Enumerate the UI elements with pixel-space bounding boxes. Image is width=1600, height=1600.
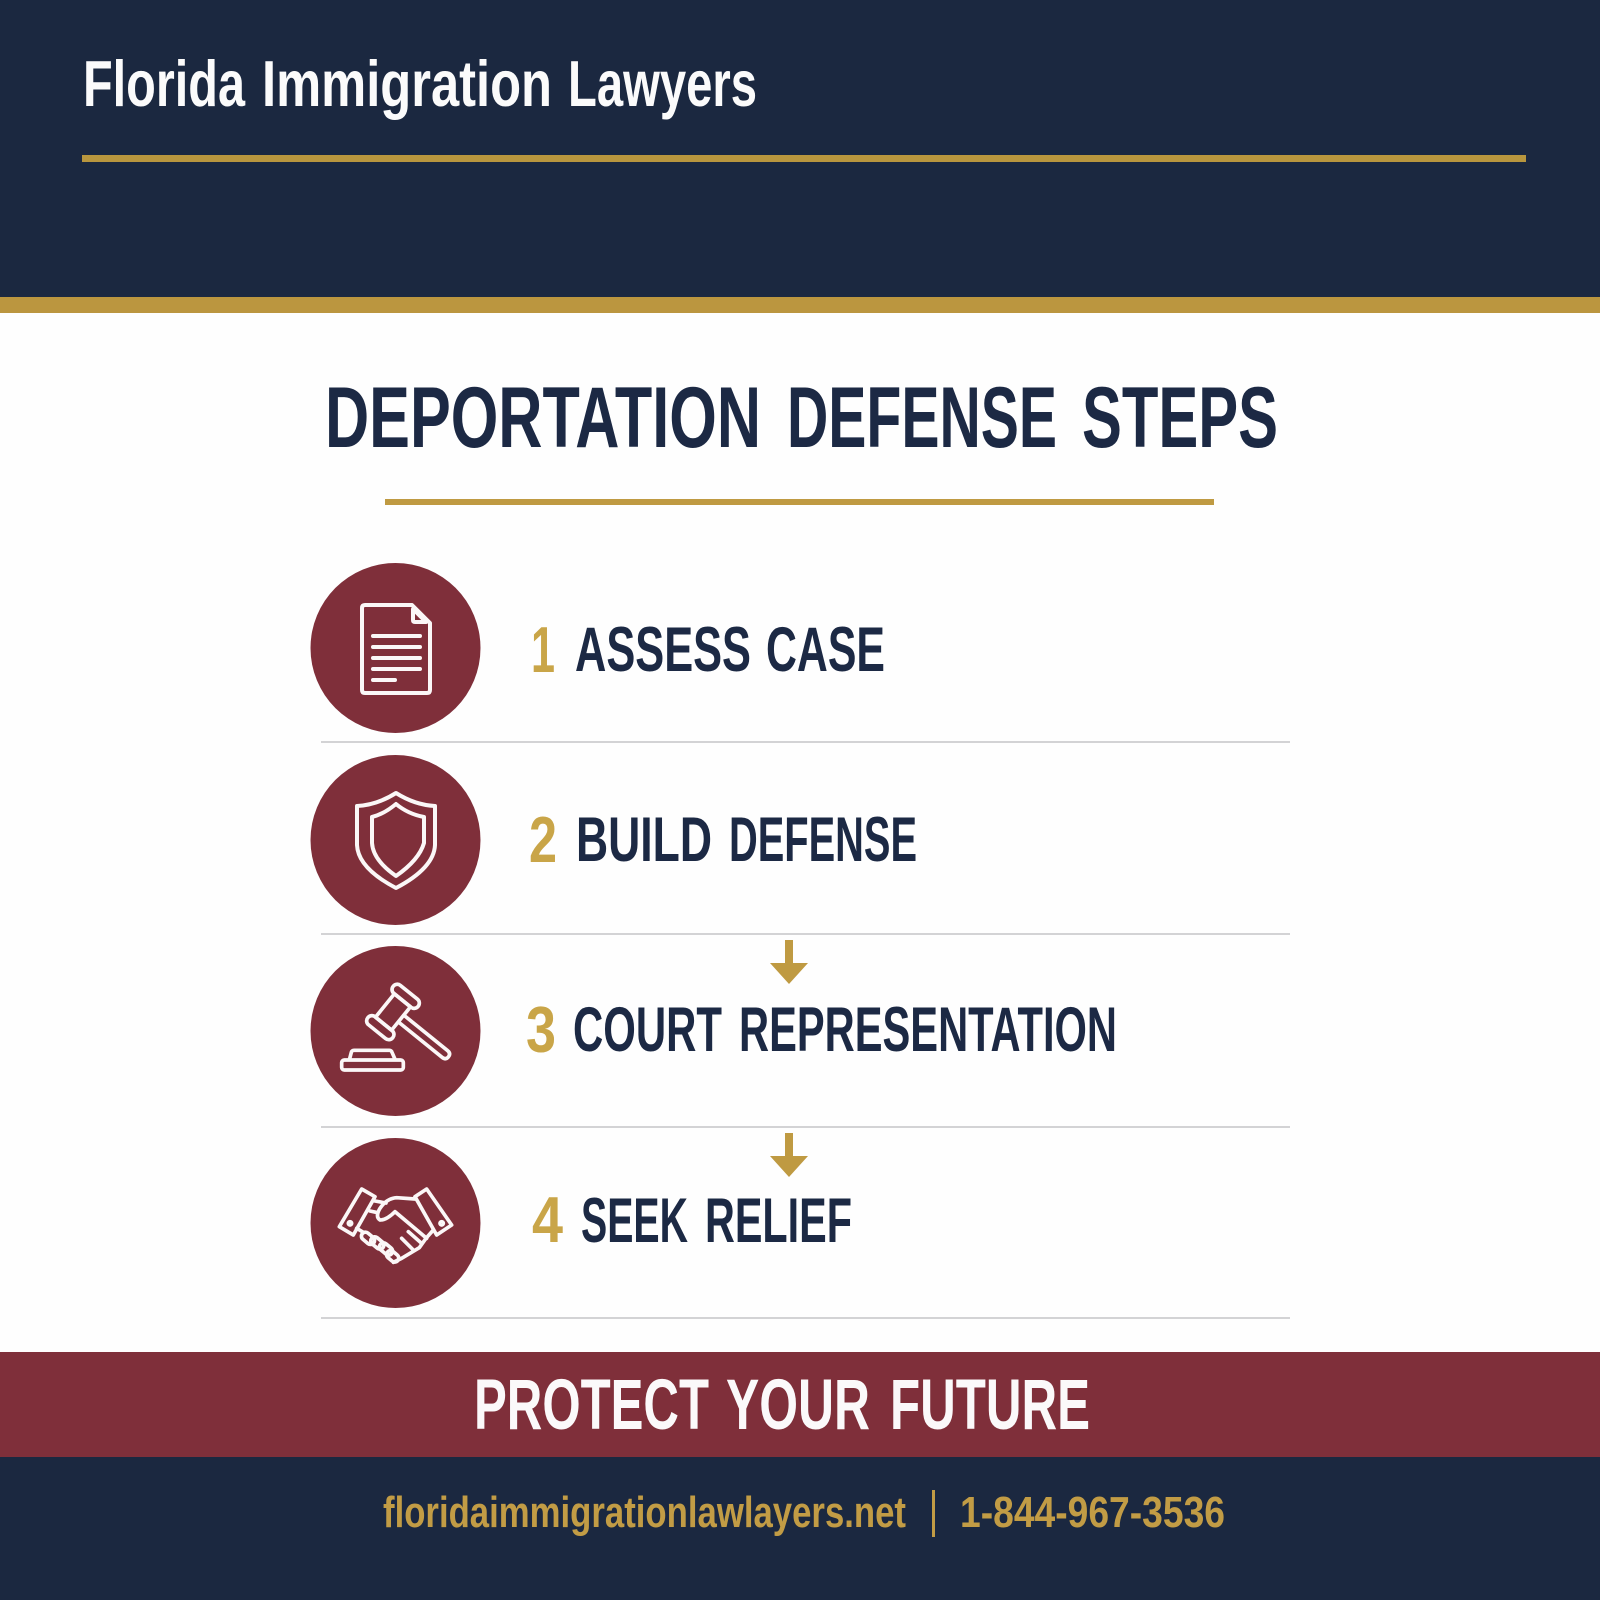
phone: 1-844-967-3536 (960, 1488, 1225, 1537)
title (325, 370, 1278, 466)
title: STEPS (1082, 370, 1278, 466)
step 3 label: 3 (526, 993, 556, 1066)
icon: handshake (310, 1138, 480, 1308)
icon: shield (310, 755, 480, 925)
arrow: step 2 to 3 (770, 940, 808, 984)
firm name: Florida (83, 47, 246, 120)
step 3: court representation (310, 946, 1117, 1116)
step 4 label: SEEK (581, 1186, 688, 1256)
step 2 label (529, 803, 917, 876)
header panel (0, 0, 1600, 313)
step 1 label: ASSESS (575, 615, 751, 685)
step 2 label: BUILD (576, 805, 712, 875)
step 3 label: COURT (573, 995, 722, 1065)
step 4 label: 4 (532, 1183, 563, 1256)
step 4: seek relief (310, 1138, 852, 1308)
step 3 label: REPRESENTATION (739, 995, 1117, 1065)
title: DEFENSE (787, 370, 1057, 466)
title: DEPORTATION (325, 370, 761, 466)
step 1: assess case (310, 563, 885, 733)
step 2 label: DEFENSE (729, 805, 917, 875)
firm name (83, 47, 757, 120)
footer panel (0, 1457, 1600, 1600)
website: floridaimmigrationlawlayers.net (383, 1488, 906, 1537)
step 2: build defense (310, 755, 917, 925)
call-to-action banner: PROTECT (474, 1366, 709, 1445)
firm name: Lawyers (568, 47, 757, 120)
step 4 label: RELIEF (705, 1186, 852, 1256)
arrow: step 3 to 4 (770, 1133, 808, 1177)
icon: gavel (310, 946, 480, 1116)
step 1 label (531, 613, 885, 686)
step 4 label (532, 1183, 852, 1256)
call-to-action banner: YOUR (726, 1366, 870, 1445)
step 1 label: CASE (766, 615, 885, 685)
step 1 label: 1 (531, 613, 555, 686)
step 2 label: 2 (529, 803, 557, 876)
step 3 label (526, 993, 1117, 1066)
firm name: Immigration (262, 47, 552, 120)
call-to-action banner (0, 1352, 1600, 1457)
icon: document (310, 563, 480, 733)
call-to-action banner: FUTURE (890, 1366, 1090, 1445)
